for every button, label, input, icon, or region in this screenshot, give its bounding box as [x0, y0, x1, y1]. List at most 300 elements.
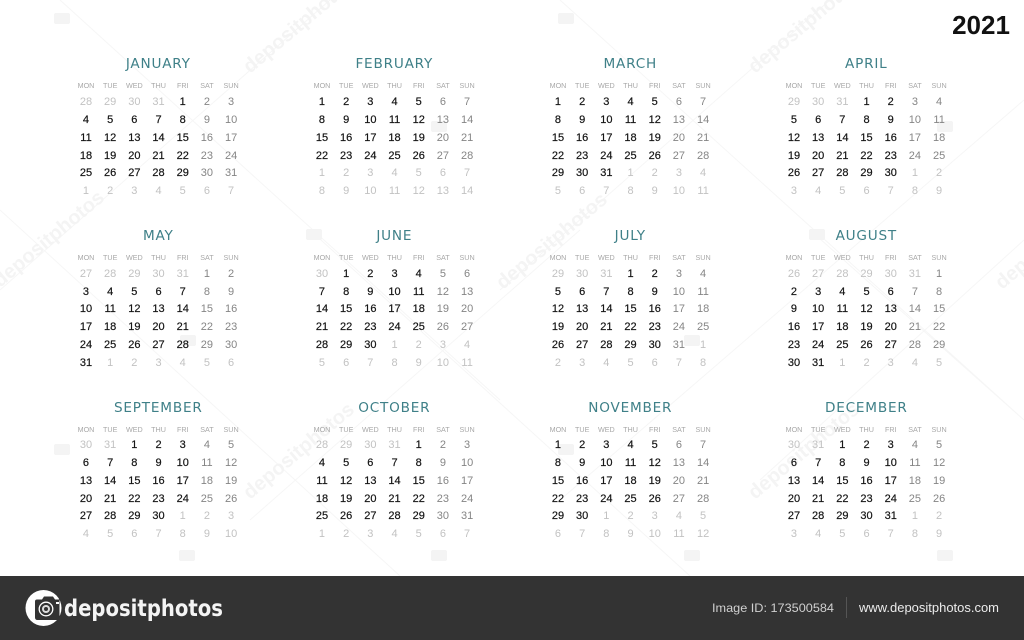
- month: June: 4: [416, 268, 422, 280]
- month: January: [78, 56, 239, 197]
- month: August: 2: [863, 357, 870, 369]
- month: April: 25: [933, 150, 945, 162]
- month: February: 25: [388, 150, 401, 162]
- month: April: MON: [786, 81, 802, 90]
- month: June: 19: [437, 303, 449, 315]
- month: February: 27: [437, 150, 449, 162]
- month: October: 7: [391, 457, 398, 469]
- month: May: 19: [128, 321, 140, 333]
- month: July: 8: [700, 357, 706, 369]
- month: June: FRI: [413, 253, 425, 262]
- month: June: 11: [413, 286, 424, 298]
- month: December: 15: [836, 475, 848, 487]
- month: January: SUN: [224, 81, 239, 90]
- month: February: 11: [389, 114, 400, 126]
- month: September: [78, 400, 239, 540]
- month: January: 28: [80, 96, 92, 108]
- month: November: 8: [555, 457, 561, 469]
- month: February: 6: [440, 96, 446, 108]
- month: January: 7: [155, 114, 162, 126]
- month: January: 27: [128, 167, 140, 179]
- month: August: THU: [859, 253, 874, 262]
- month: November: 20: [673, 475, 685, 487]
- month: December: 27: [788, 510, 800, 522]
- month: June: 1: [343, 268, 349, 280]
- month: May: [78, 228, 239, 369]
- month: October: 18: [316, 493, 328, 505]
- month: April: 29: [860, 167, 873, 179]
- month: July: 5: [555, 286, 561, 298]
- month: January: WED: [126, 81, 143, 90]
- month: February: 6: [440, 167, 446, 179]
- month: October: SUN: [460, 424, 475, 434]
- month: December: 17: [885, 475, 897, 487]
- month: January: 8: [180, 114, 186, 126]
- month: March: 19: [649, 132, 661, 144]
- month: July: 23: [649, 321, 661, 333]
- month: January: SAT: [200, 81, 214, 90]
- month: October: 26: [340, 510, 352, 522]
- month: November: 22: [552, 493, 564, 505]
- month: February: 21: [461, 132, 473, 144]
- month: November: 12: [649, 457, 661, 469]
- month: May: MON: [78, 253, 94, 262]
- month: August: WED: [834, 253, 851, 262]
- month: February: 5: [416, 96, 422, 108]
- month: February: 7: [464, 167, 470, 179]
- month: May: 13: [152, 303, 165, 315]
- month: September: 3: [180, 439, 186, 451]
- month: September: 2: [204, 510, 210, 522]
- month: April: 30: [812, 96, 824, 108]
- month: August: 26: [788, 268, 800, 280]
- month: July: 3: [676, 268, 682, 280]
- month: February: 2: [343, 167, 349, 179]
- month: March: 4: [700, 167, 706, 179]
- month: November: 24: [600, 493, 612, 505]
- month: May: 28: [104, 268, 116, 280]
- month: March: 15: [552, 132, 564, 144]
- month: November: 27: [673, 493, 685, 505]
- month: March: MARCH: [604, 56, 657, 72]
- month: November: 10: [649, 528, 661, 540]
- month: December: 8: [839, 457, 845, 469]
- month: August: 26: [860, 339, 873, 351]
- month: August: 3: [888, 357, 894, 369]
- month: December: 13: [788, 475, 800, 487]
- month: March: 21: [697, 132, 709, 144]
- month: April: FRI: [885, 81, 897, 90]
- month: April: 10: [909, 114, 921, 126]
- month: July: 6: [579, 286, 585, 298]
- month: August: 13: [885, 303, 897, 315]
- month: September: 18: [201, 475, 213, 487]
- month: May: 9: [228, 286, 234, 298]
- month: September: 10: [225, 528, 237, 540]
- month: November: 2: [627, 510, 634, 522]
- month: March: 3: [676, 167, 682, 179]
- month: November: 5: [652, 439, 658, 451]
- month: May: 27: [152, 339, 165, 351]
- month: August: 27: [812, 268, 824, 280]
- month: March: 9: [579, 114, 585, 126]
- month: February: 22: [316, 150, 328, 162]
- month: June: 2: [367, 268, 373, 280]
- month: January: 5: [180, 185, 186, 197]
- month: September: 4: [204, 439, 210, 451]
- month: September: 12: [225, 457, 237, 469]
- month: May: SUN: [224, 253, 239, 262]
- month: July: 17: [673, 303, 685, 315]
- month: November: 2: [579, 439, 585, 451]
- month: December: 16: [860, 475, 873, 487]
- month: January: 26: [104, 167, 116, 179]
- month: October: 1: [416, 439, 422, 451]
- month: March: 27: [673, 150, 685, 162]
- month: August: 16: [788, 321, 800, 333]
- month: August: 2: [791, 286, 797, 298]
- month: April: 21: [836, 150, 848, 162]
- month: January: 16: [201, 132, 213, 144]
- month: September: 9: [155, 457, 162, 469]
- month: March: 2: [652, 167, 658, 179]
- month: November: 30: [576, 510, 588, 522]
- month: November: 14: [697, 457, 709, 469]
- month: May: TUE: [103, 253, 117, 262]
- month: May: 21: [177, 321, 189, 333]
- month: August: 28: [909, 339, 921, 351]
- month: March: 24: [600, 150, 612, 162]
- month: November: 6: [555, 528, 561, 540]
- month: July: 22: [624, 321, 637, 333]
- month: January: 17: [225, 132, 237, 144]
- month: June: 10: [437, 357, 449, 369]
- month: July: 7: [676, 357, 682, 369]
- month: September: MON: [78, 424, 94, 434]
- month: December: 31: [885, 510, 897, 522]
- month: July: 29: [552, 268, 564, 280]
- month: August: AUGUST: [836, 228, 897, 244]
- month: September: 1: [131, 439, 137, 451]
- month: March: 20: [673, 132, 685, 144]
- month: January: 18: [80, 150, 92, 162]
- month: May: 30: [152, 268, 165, 280]
- month: July: 24: [673, 321, 685, 333]
- month: June: 30: [316, 268, 328, 280]
- month: July: 31: [600, 268, 612, 280]
- month: August: 23: [788, 339, 800, 351]
- month: October: 9: [440, 457, 446, 469]
- watermark pattern: depositphotos: [239, 398, 359, 504]
- month: February: 9: [343, 114, 349, 126]
- website url: www.depositphotos.com: [858, 600, 999, 615]
- month: June: 2: [416, 339, 422, 351]
- month: December: 14: [812, 475, 824, 487]
- month: February: FRI: [413, 81, 425, 90]
- month: November: 1: [555, 439, 561, 451]
- month: April: 22: [860, 150, 873, 162]
- month: August: [786, 228, 947, 369]
- month: August: 30: [788, 357, 800, 369]
- month: March: 4: [627, 96, 634, 108]
- month: August: 24: [812, 339, 824, 351]
- month: October: 24: [461, 493, 473, 505]
- month: October: 25: [316, 510, 328, 522]
- month: September: 8: [180, 528, 186, 540]
- month: August: 9: [791, 303, 797, 315]
- month: July: 30: [649, 339, 661, 351]
- month: May: 20: [152, 321, 165, 333]
- month: June: WED: [362, 253, 379, 262]
- month: October: 21: [388, 493, 401, 505]
- month: November: 29: [552, 510, 564, 522]
- month: May: 12: [128, 303, 140, 315]
- month: December: 4: [815, 528, 821, 540]
- month: October: 13: [364, 475, 376, 487]
- month: May: 6: [228, 357, 234, 369]
- month: July: 9: [652, 286, 658, 298]
- month: January: 30: [201, 167, 213, 179]
- month: January: 12: [104, 132, 116, 144]
- month: August: 14: [909, 303, 921, 315]
- month: January: 2: [204, 96, 210, 108]
- month: December: 18: [909, 475, 921, 487]
- month: May: 15: [201, 303, 213, 315]
- month: March: 1: [555, 96, 561, 108]
- month: April: TUE: [811, 81, 825, 90]
- month: September: 8: [131, 457, 137, 469]
- month: October: 16: [437, 475, 449, 487]
- month: July: 5: [627, 357, 634, 369]
- month: March: 22: [552, 150, 564, 162]
- month: June: JUNE: [376, 228, 412, 244]
- month: June: 8: [343, 286, 349, 298]
- month: September: FRI: [177, 424, 189, 434]
- month: June: 7: [319, 286, 325, 298]
- month: January: 28: [152, 167, 165, 179]
- month: February: 4: [391, 167, 398, 179]
- month: June: 13: [461, 286, 473, 298]
- month: November: 16: [576, 475, 588, 487]
- month: June: THU: [387, 253, 402, 262]
- month: June: 1: [391, 339, 398, 351]
- month: July: 14: [600, 303, 612, 315]
- month: September: 5: [228, 439, 234, 451]
- month: March: 10: [600, 114, 612, 126]
- month: June: 11: [461, 357, 473, 369]
- month: June: 24: [388, 321, 401, 333]
- month: January: 2: [107, 185, 113, 197]
- month: March: TUE: [575, 81, 589, 90]
- month: June: 25: [413, 321, 425, 333]
- month: February: 11: [389, 185, 400, 197]
- month: July: 3: [579, 357, 585, 369]
- month: October: THU: [387, 424, 402, 434]
- month: February: 12: [413, 114, 425, 126]
- month: June: 3: [440, 339, 446, 351]
- month: April: 2: [888, 96, 894, 108]
- month: February: 3: [367, 96, 373, 108]
- month: December: 2: [863, 439, 870, 451]
- month: December: 11: [909, 457, 921, 469]
- month: October: SAT: [436, 424, 450, 434]
- month: January: THU: [151, 81, 166, 90]
- month: February: 4: [391, 96, 398, 108]
- month: September: 24: [177, 493, 189, 505]
- month: February: 26: [413, 150, 425, 162]
- month: October: 10: [461, 457, 473, 469]
- month: August: 7: [912, 286, 918, 298]
- month: July: SAT: [672, 253, 686, 262]
- month: June: 29: [340, 339, 352, 351]
- month: November: 21: [697, 475, 709, 487]
- month: September: 29: [128, 510, 140, 522]
- month: June: 18: [413, 303, 425, 315]
- month: January: FRI: [177, 81, 189, 90]
- month: October: 29: [413, 510, 425, 522]
- month: October: 23: [437, 493, 449, 505]
- month: November: SUN: [696, 424, 711, 434]
- month: June: 12: [437, 286, 449, 298]
- month: June: 28: [316, 339, 328, 351]
- month: October: OCTOBER: [358, 400, 430, 416]
- month: June: 22: [340, 321, 352, 333]
- month: December: 1: [912, 510, 918, 522]
- month: October: 6: [367, 457, 373, 469]
- month: February: 1: [319, 167, 325, 179]
- month: November: THU: [623, 424, 638, 434]
- month: April: 5: [791, 114, 797, 126]
- month: April: 8: [912, 185, 918, 197]
- month: November: 12: [697, 528, 709, 540]
- month: March: 18: [624, 132, 637, 144]
- month: March: THU: [623, 81, 638, 90]
- month: June: 26: [437, 321, 449, 333]
- month: December: 3: [888, 439, 894, 451]
- month: October: TUE: [339, 424, 353, 434]
- month: June: 5: [440, 268, 446, 280]
- month: January: 13: [128, 132, 140, 144]
- month: January: 5: [107, 114, 113, 126]
- month: December: MON: [786, 424, 802, 434]
- month: July: 15: [624, 303, 637, 315]
- month: March: 11: [697, 185, 709, 197]
- month: October: 28: [388, 510, 401, 522]
- month: June: [314, 228, 475, 369]
- month: February: 15: [316, 132, 328, 144]
- month: September: 1: [180, 510, 186, 522]
- month: March: 29: [552, 167, 564, 179]
- month: October: 11: [316, 475, 328, 487]
- month: March: [550, 56, 711, 197]
- month: August: 12: [860, 303, 873, 315]
- month: June: 6: [464, 268, 470, 280]
- month: January: 24: [225, 150, 237, 162]
- month: December: 26: [933, 493, 945, 505]
- month: September: 4: [83, 528, 89, 540]
- month: May: 5: [204, 357, 210, 369]
- month: October: 28: [316, 439, 328, 451]
- month: July: 26: [552, 339, 564, 351]
- month: July: 29: [624, 339, 637, 351]
- month: February: 16: [340, 132, 352, 144]
- month: April: 13: [812, 132, 824, 144]
- month: January: 19: [104, 150, 116, 162]
- month: April: 29: [788, 96, 800, 108]
- month: July: JULY: [615, 228, 646, 244]
- month: July: 11: [697, 286, 709, 298]
- month: December: 31: [812, 439, 824, 451]
- month: July: 8: [627, 286, 634, 298]
- month: November: 1: [603, 510, 609, 522]
- month: June: 8: [391, 357, 398, 369]
- month: June: 5: [319, 357, 325, 369]
- month: March: MON: [550, 81, 566, 90]
- month: October: 17: [461, 475, 473, 487]
- month: December: 6: [863, 528, 870, 540]
- month: March: 6: [676, 96, 682, 108]
- month: April: SUN: [932, 81, 947, 90]
- month: August: 30: [885, 268, 897, 280]
- month: January: 7: [228, 185, 234, 197]
- month: March: 30: [576, 167, 588, 179]
- month: April: 8: [863, 114, 870, 126]
- month: July: 1: [627, 268, 634, 280]
- month: September: 3: [228, 510, 234, 522]
- month: March: 17: [600, 132, 612, 144]
- month: October: 5: [416, 528, 422, 540]
- month: October: WED: [362, 424, 379, 434]
- month: July: 18: [697, 303, 709, 315]
- month: August: 25: [836, 339, 848, 351]
- month: July: FRI: [649, 253, 661, 262]
- month: August: FRI: [885, 253, 897, 262]
- month: May: 3: [155, 357, 162, 369]
- month: December: 4: [912, 439, 918, 451]
- month: February: SUN: [460, 81, 475, 90]
- month: September: 22: [128, 493, 140, 505]
- month: December: 9: [863, 457, 870, 469]
- month: August: 17: [812, 321, 824, 333]
- month: July: 28: [600, 339, 612, 351]
- month: October: FRI: [413, 424, 425, 434]
- month: May: 29: [128, 268, 140, 280]
- month: April: 9: [888, 114, 894, 126]
- month: June: SUN: [460, 253, 475, 262]
- month: January: 30: [128, 96, 140, 108]
- month: February: 8: [319, 185, 325, 197]
- month: November: 23: [576, 493, 588, 505]
- month: May: 29: [201, 339, 213, 351]
- month: October: 2: [440, 439, 446, 451]
- month: January: 31: [152, 96, 165, 108]
- month: April: 24: [909, 150, 921, 162]
- logo wordmark: depositphotos: [64, 596, 223, 622]
- month: May: 17: [80, 321, 92, 333]
- month: February: 10: [364, 185, 376, 197]
- month: April: 1: [863, 96, 870, 108]
- month: January: 11: [80, 132, 92, 144]
- month: April: 5: [839, 185, 845, 197]
- month: March: 13: [673, 114, 685, 126]
- month: November: 25: [624, 493, 637, 505]
- month: October: 5: [343, 457, 349, 469]
- month: May: 6: [155, 286, 162, 298]
- month: November: NOVEMBER: [588, 400, 672, 416]
- month: September: TUE: [103, 424, 117, 434]
- month: December: FRI: [885, 424, 897, 434]
- month: March: 12: [649, 114, 661, 126]
